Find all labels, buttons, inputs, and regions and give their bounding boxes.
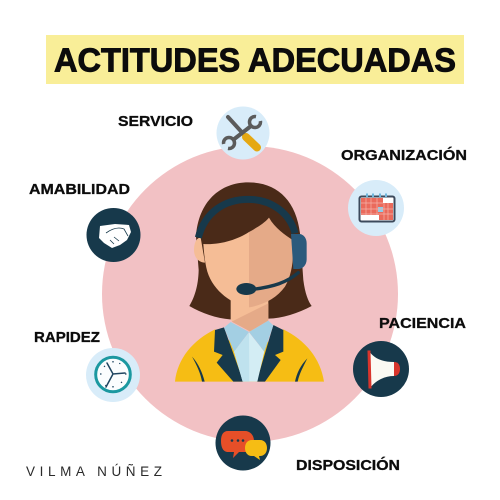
ear cup (291, 234, 307, 269)
shirt (234, 332, 264, 382)
icon: megaphone (353, 341, 409, 397)
ear (194, 238, 205, 263)
signature: VILMA NÚÑEZ (26, 464, 162, 479)
face left (203, 232, 249, 307)
lapels (214, 327, 243, 382)
icon: tools (216, 106, 270, 160)
jacket fold lines (192, 357, 205, 382)
icon: clock (86, 348, 140, 402)
jacket (175, 329, 324, 382)
hair (189, 182, 312, 319)
neck (231, 290, 268, 332)
icon: handshake (86, 208, 140, 262)
label: amabilidad: AMABILIDAD (29, 182, 130, 198)
label: paciencia: PACIENCIA (379, 316, 467, 332)
label: servicio: SERVICIO (118, 114, 193, 130)
face right shaded (249, 218, 293, 307)
label: disposicion: DISPOSICIÓN (296, 456, 400, 474)
microphone boom (253, 273, 298, 289)
headband (198, 199, 295, 238)
icon: chat bubbles (216, 416, 270, 470)
person with headset (175, 182, 324, 382)
label: rapidez: RAPIDEZ (34, 330, 100, 346)
title: ACTITUDES ADECUADAS (54, 42, 456, 80)
label: organizacion: ORGANIZACIÓN (341, 146, 467, 164)
icon: calendar (348, 180, 404, 236)
pink background circle (102, 146, 398, 442)
